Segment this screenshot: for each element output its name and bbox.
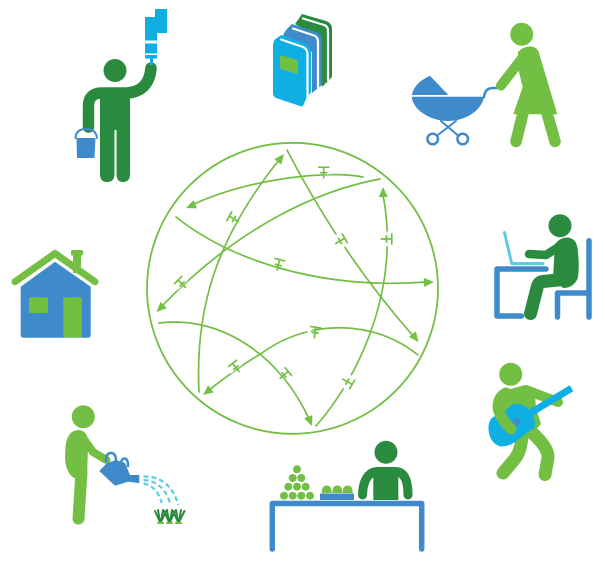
- icon: market stall vendor: [272, 441, 422, 549]
- icon: woman pushing pram: [412, 23, 557, 144]
- tick markers: [173, 167, 392, 391]
- arrowheads: [153, 151, 434, 428]
- icon: stack of books: [273, 14, 332, 106]
- network globe: [147, 143, 438, 434]
- icon: person working on laptop: [497, 214, 589, 317]
- icon: guitarist: [488, 363, 572, 474]
- icon: house: [15, 250, 95, 338]
- icon: painter with roller and bucket: [76, 9, 167, 182]
- icon: gardener with watering can: [65, 405, 184, 523]
